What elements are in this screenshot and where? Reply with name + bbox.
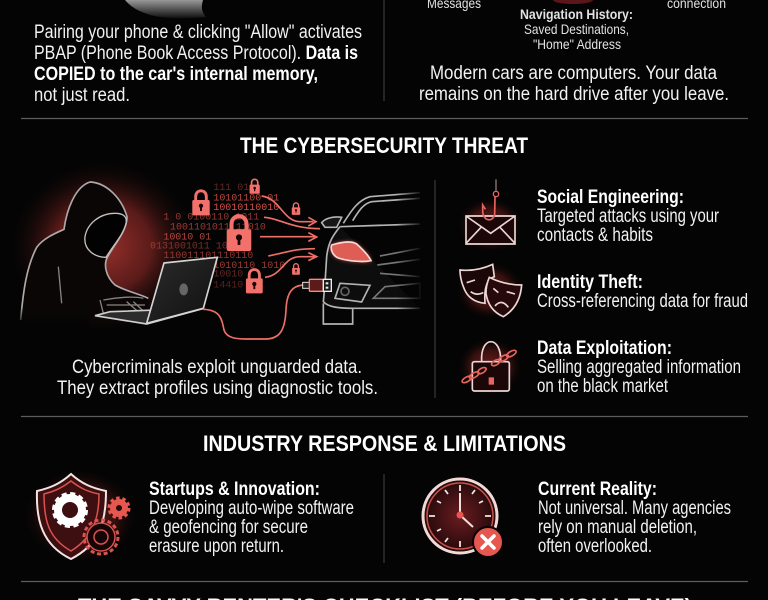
threat list (455, 179, 748, 397)
text: social engineering (537, 187, 720, 246)
text block: pairing explanation (34, 22, 362, 106)
binary data stream: 1001101011 11010 (170, 221, 266, 232)
section: phone pairing (top left) (34, 0, 362, 106)
text block: modern cars: remains on the hard drive after you leave. (419, 84, 729, 105)
text: social engineering: Social Engineering: (537, 187, 684, 208)
label: navigation history: "Home" Address (533, 36, 621, 52)
usb plug (303, 279, 331, 291)
text: data exploitation: on the black market (537, 376, 669, 397)
headlight (331, 242, 371, 261)
text: identity theft: Identity Theft: (537, 272, 643, 293)
text: startups: & geofencing for secure (149, 517, 308, 538)
heading: industry response: INDUSTRY RESPONSE & LIMITATIONS (203, 431, 566, 456)
text: data exploitation (537, 338, 741, 397)
laptop (95, 257, 217, 324)
icon: phishing envelope (457, 179, 523, 253)
icon: theatre masks (455, 261, 525, 320)
label: navigation history: Saved Destinations, (524, 21, 629, 37)
binary data stream: 1010110 1010 (213, 260, 285, 271)
text block: pairing explanation: PBAP (Phone Book Access Protocol). Data is (34, 43, 358, 64)
binary data stream: 10010 01 (163, 231, 211, 242)
panel: startups and innovation (22, 468, 354, 564)
cable to car (203, 285, 305, 339)
binary data stream: 111 01 (213, 182, 249, 193)
caption: cybercriminals (57, 357, 378, 399)
panel: current reality (423, 479, 731, 557)
text: social engineering: Targeted attacks using your (537, 206, 720, 227)
text: social engineering: contacts & habits (537, 225, 653, 246)
text: startups: Developing auto-wipe software (149, 498, 354, 519)
binary data stream: 0131001011 10101 (150, 241, 246, 252)
icon: phone fragment (125, 0, 206, 18)
text: startups: erasure upon return. (149, 536, 284, 557)
section: stored data (top right) (419, 0, 729, 105)
text block: modern cars (419, 63, 729, 105)
binary data stream: 14410 (213, 279, 243, 290)
text: current reality: Current Reality: (538, 479, 657, 500)
icon: clock with x (423, 479, 503, 557)
caption: cybercriminals: They extract profiles using diagnostic tools. (57, 378, 378, 399)
text: startups (149, 479, 354, 557)
label: navigation history (520, 6, 633, 52)
text: identity theft (537, 272, 748, 312)
text: startups: Startups & Innovation: (149, 479, 320, 500)
text block: modern cars: Modern cars are computers. Your data (430, 63, 717, 84)
binary data stream: 10101100 01 (213, 193, 279, 204)
red glow behind hacker (7, 158, 200, 335)
caption: cybercriminals: Cybercriminals exploit unguarded data. (72, 357, 362, 378)
binary data stream: 10010 (213, 269, 243, 280)
icon: broken chain lock (457, 337, 523, 396)
label: navigation history: Navigation History: (520, 6, 633, 22)
text: current reality: often overlooked. (538, 536, 652, 557)
binary data stream: 10010110010 (213, 202, 279, 213)
text block: pairing explanation: COPIED to the car's internal memory, (34, 64, 318, 85)
text: current reality (538, 479, 731, 557)
text block: pairing explanation: Pairing your phone & clicking "Allow" activates (34, 22, 362, 43)
binary data stream (150, 182, 285, 290)
binary data stream: 1 0 0100110 1011 (163, 211, 259, 222)
hacker silhouette (13, 182, 148, 327)
car front (322, 193, 420, 324)
locks (192, 179, 300, 293)
heading: the cybersecurity threat: THE CYBERSECURITY THREAT (240, 133, 528, 158)
text block: pairing explanation: not just read. (34, 85, 130, 106)
binary data stream: 110011101110110 (163, 250, 253, 261)
icon: shield with gears (22, 468, 138, 564)
text: current reality: rely on manual deletion, (538, 517, 697, 538)
icon: red glow fragment (553, 0, 593, 4)
car fade (397, 187, 423, 327)
illustration: hacker attacking car (7, 158, 423, 339)
arrows to car (260, 196, 320, 277)
text: data exploitation: Data Exploitation: (537, 338, 672, 359)
